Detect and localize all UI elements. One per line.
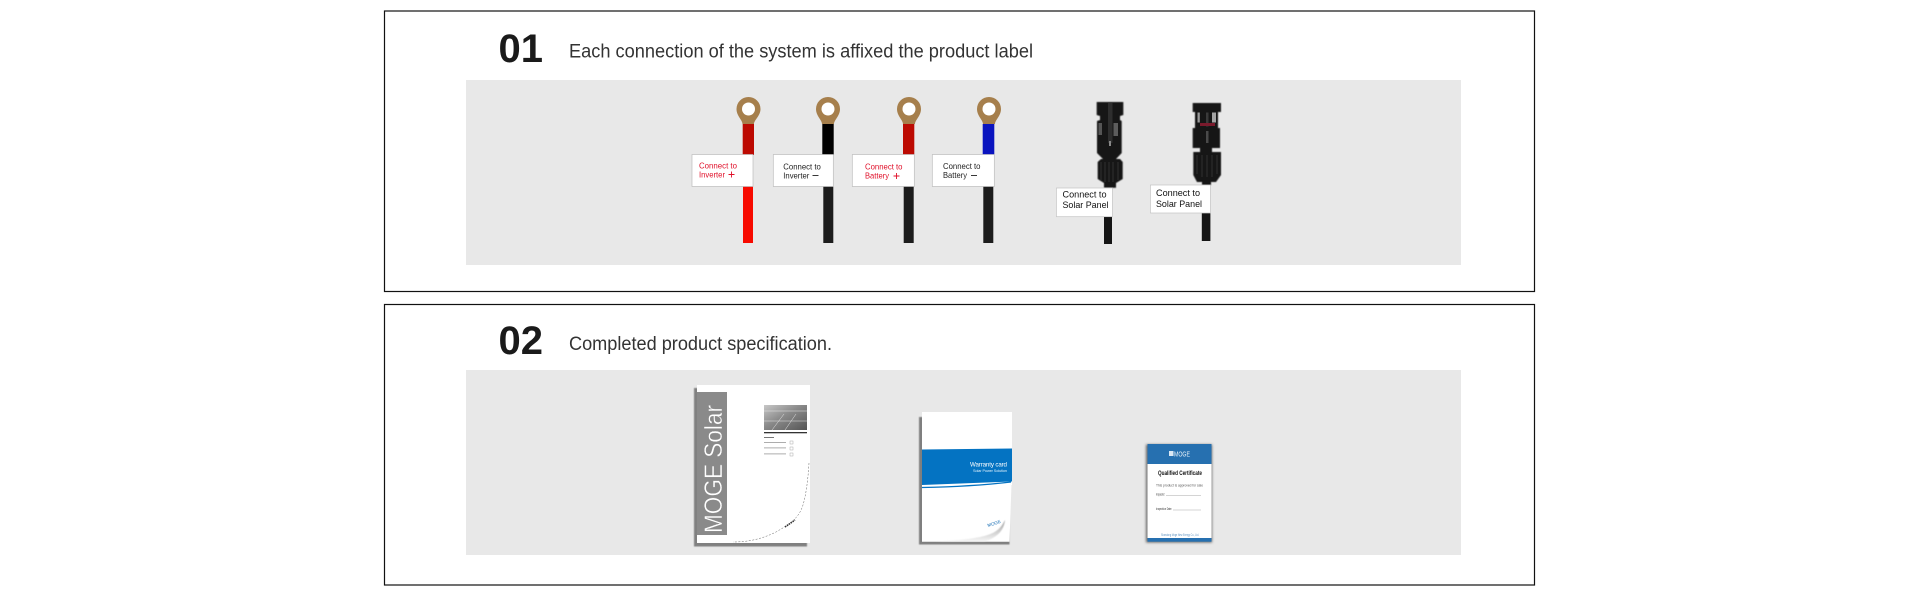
connector: solar panel right xyxy=(1150,103,1221,241)
connector: solar panel left: Solar Panel xyxy=(1062,200,1108,210)
certificate inspector line: Inspector: xyxy=(1156,492,1165,496)
frame: step 02 xyxy=(384,304,1534,585)
cable: battery negative xyxy=(932,97,1001,243)
manual page curl line xyxy=(733,463,809,542)
certificate statement: This product is approved for sale xyxy=(1156,482,1204,488)
panel: step 02 product documents xyxy=(384,304,1534,585)
certificate page xyxy=(1148,444,1212,542)
document: warranty card xyxy=(919,412,1012,544)
grey background band: step 01 xyxy=(466,80,1461,265)
heading: step 02: Completed product specification. xyxy=(569,334,832,355)
document: MOGE Solar manual xyxy=(694,385,810,546)
warranty blue band with title: Warranty card xyxy=(970,462,1008,468)
certificate blue header: MOGE xyxy=(1174,452,1190,458)
warranty page xyxy=(922,412,1012,485)
frame: step 01 xyxy=(384,11,1534,292)
manual cover photo xyxy=(764,405,807,430)
cable: inverter positive: Connect to xyxy=(699,160,737,170)
grey background band: step 02 xyxy=(466,370,1461,555)
cable: battery positive: Connect to xyxy=(865,162,903,172)
manual page xyxy=(697,385,810,543)
step number 01: 01 xyxy=(498,27,543,71)
connector: solar panel right: Connect to xyxy=(1156,188,1200,198)
warranty blue band with title: Solar Power Solution xyxy=(973,469,1007,473)
cable: battery positive: Battery xyxy=(865,170,890,180)
document: qualified certificate xyxy=(1146,444,1212,542)
manual side band with title: MOGE Solar xyxy=(700,405,728,533)
warranty shadow xyxy=(919,417,1010,544)
cable: battery negative: Connect to xyxy=(943,161,981,171)
certificate title: Qualified Certificate xyxy=(1158,471,1203,477)
warranty blue band with title xyxy=(922,448,1012,488)
step number 02: 02 xyxy=(498,319,543,363)
manual shadow xyxy=(694,388,807,546)
certificate bottom bar xyxy=(1148,538,1212,542)
certificate shadow xyxy=(1146,444,1212,542)
certificate footer text: Shandong Moge New Energy Co., Ltd. xyxy=(1161,533,1199,537)
cable: inverter negative xyxy=(773,97,840,243)
connector: solar panel left xyxy=(1056,102,1123,244)
cable: inverter positive xyxy=(692,97,760,243)
panel: step 01 product labels xyxy=(384,11,1534,292)
manual small text lines xyxy=(764,432,807,456)
manual logo mark xyxy=(785,520,795,527)
cable: inverter negative: Inverter xyxy=(783,170,809,180)
heading: step 01: Each connection of the system is affixed the product label xyxy=(569,42,1033,62)
cable: battery positive xyxy=(852,97,921,243)
cable: inverter positive: Inverter xyxy=(699,170,725,180)
cable: inverter negative: Connect to xyxy=(783,162,821,172)
warranty logo: MOGE xyxy=(987,519,1001,528)
cable: battery negative: Battery xyxy=(943,170,968,180)
connector: solar panel right: Solar Panel xyxy=(1156,199,1202,209)
connector: solar panel left: Connect to xyxy=(1062,190,1106,200)
certificate inspection date line: Inspection Date: xyxy=(1156,507,1172,511)
warranty curl shading xyxy=(935,520,1005,542)
